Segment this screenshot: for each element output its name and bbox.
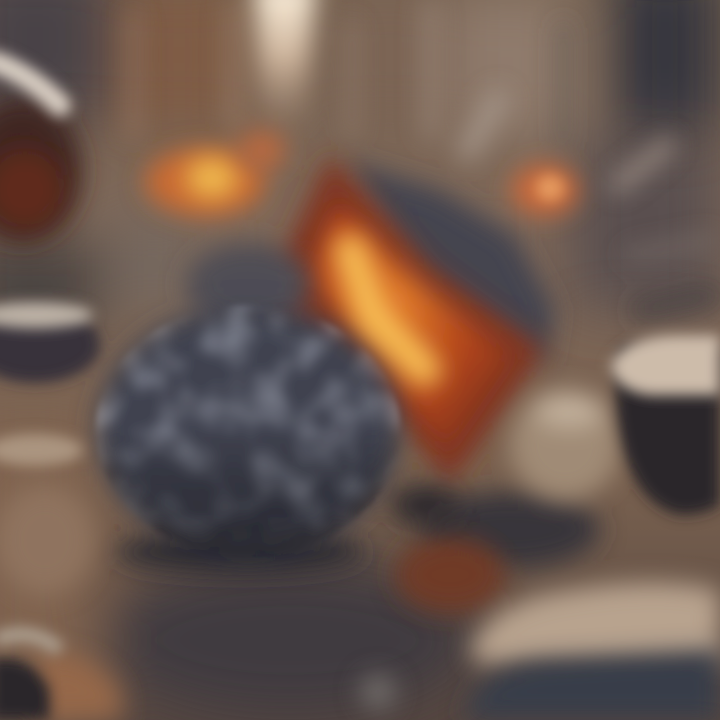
light beam [254,0,316,135]
bottom-right rock [465,582,720,720]
left flame [145,130,286,216]
right dark rock [610,335,720,515]
right flame [511,164,579,216]
left rocks [0,302,122,720]
main blue-grey rock [90,243,410,572]
bottom floor highlight [360,674,396,710]
dark upper rock behind core [345,160,555,365]
top-left rock [0,62,82,242]
red floor reflection [390,485,600,613]
glowing core [262,155,545,485]
vertical streaks [125,0,571,150]
right streaks [468,100,712,310]
tan rock [510,390,620,500]
